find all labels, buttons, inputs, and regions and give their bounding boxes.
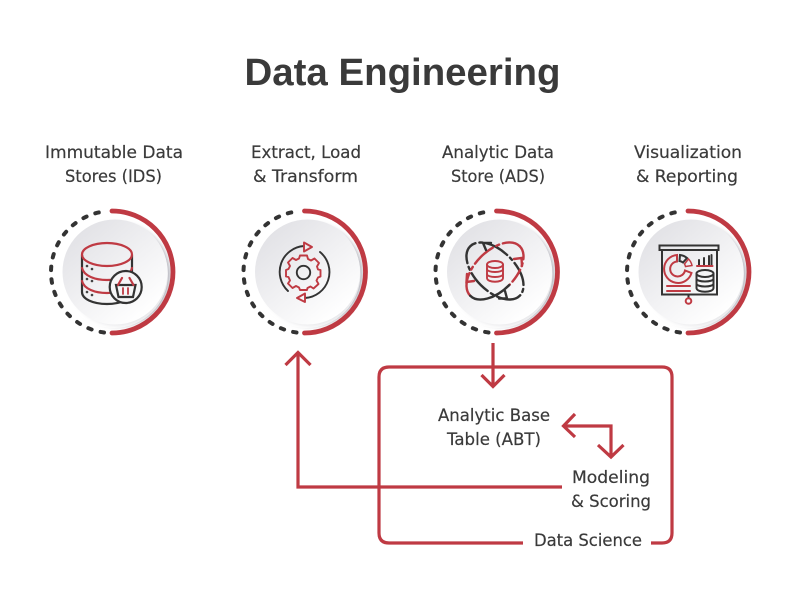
label: Extract, Load & Transform: Extract, Load [251, 143, 361, 163]
label: Visualization & Reporting [634, 143, 742, 187]
label: Immutable Data Stores: Immutable Data [45, 143, 183, 163]
label: Analytic Base Table: Table (ABT) [446, 430, 541, 450]
label: Analytic Base Table [438, 406, 550, 450]
arrow: ADS to ABT [482, 343, 504, 386]
label: Immutable Data Stores [45, 143, 183, 187]
label: Extract, Load & Transform: & Transform [253, 167, 358, 187]
label: Modeling & Scoring: & Scoring [571, 492, 651, 512]
label: Analytic Data Store: Analytic Data [442, 143, 554, 163]
label: Extract, Load & Transform [251, 143, 361, 187]
icon: database with basket [51, 211, 173, 333]
label: Analytic Data Store: Store (ADS) [451, 167, 545, 187]
label: Immutable Data Stores: Stores (IDS) [65, 167, 162, 187]
icon: presentation board [627, 211, 749, 333]
label: Modeling & Scoring: Modeling [572, 468, 650, 488]
label: Modeling & Scoring [571, 468, 651, 512]
panel: Data Science frame [379, 367, 672, 543]
label: Data Science: Data Science [534, 531, 642, 551]
icon: orbiting database [436, 211, 557, 333]
label: Analytic Data Store [442, 143, 554, 187]
arrow: Modeling back to Extract, Load & Transform [286, 352, 562, 487]
label: Visualization & Reporting: & Reporting [636, 167, 738, 187]
arrow: ABT and Modeling exchange [564, 414, 624, 457]
label: Visualization & Reporting: Visualization [634, 143, 742, 163]
label: Analytic Base Table: Analytic Base [438, 406, 550, 426]
title: Data Engineering [244, 52, 560, 94]
icon: gear with cycle arrows [244, 211, 365, 333]
